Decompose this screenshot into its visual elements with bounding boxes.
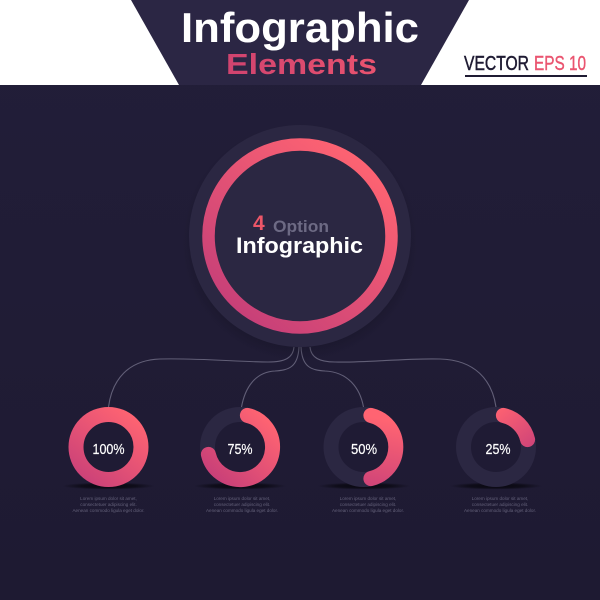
caption 4: [464, 496, 536, 513]
center label: Infographic: Infographic: [236, 233, 363, 258]
badge: Vector EPS 10: EPS 10: [534, 53, 586, 75]
option 4: 25%: 25%: [486, 441, 510, 458]
caption 2: Lorem ipsum dolor sit amet,: [214, 496, 270, 501]
disc: [189, 125, 411, 347]
center label: Option: Option: [273, 218, 329, 236]
caption 3: consectetuer adipiscing elit.: [340, 502, 396, 507]
caption 4: consectetuer adipiscing elit.: [472, 502, 528, 507]
caption 2: Aenean commodo ligula eget dolor.: [206, 508, 278, 513]
gradient ring: [208, 144, 392, 328]
caption 3: Lorem ipsum dolor sit amet,: [340, 496, 396, 501]
caption 2: [206, 496, 278, 513]
option 2: 75%: [194, 414, 286, 513]
caption 4: Lorem ipsum dolor sit amet,: [472, 496, 528, 501]
center label: 4: 4: [253, 212, 265, 235]
option 3: 50%: [318, 414, 410, 513]
caption 3: [332, 496, 404, 513]
option 4: 25%: [450, 414, 542, 513]
title: Infographic: Infographic: [181, 4, 419, 51]
header white band: [0, 0, 600, 85]
caption 2: consectetuer adipiscing elit.: [214, 502, 270, 507]
option 1: 100%: 100%: [92, 441, 124, 458]
caption 1: consectetuer adipiscing elit.: [80, 502, 137, 507]
header dark trapezoid with title: [131, 0, 469, 85]
caption 1: Lorem ipsum dolor sit amet,: [80, 496, 137, 501]
subtitle: Elements: Elements: [226, 49, 377, 81]
caption 1: Aenean commodo ligula eget dolor.: [72, 508, 145, 513]
caption 1: [72, 496, 145, 513]
option 3: 50%: 50%: [351, 441, 377, 458]
option 1: 100%: [62, 414, 154, 513]
connector lines: [108, 347, 496, 407]
badge: Vector EPS 10: [464, 53, 587, 77]
caption 3: Aenean commodo ligula eget dolor.: [332, 508, 404, 513]
caption 4: Aenean commodo ligula eget dolor.: [464, 508, 536, 513]
badge: Vector EPS 10: VECTOR: [464, 53, 529, 75]
main circle: [182, 124, 418, 360]
option 2: 75%: 75%: [228, 441, 252, 458]
